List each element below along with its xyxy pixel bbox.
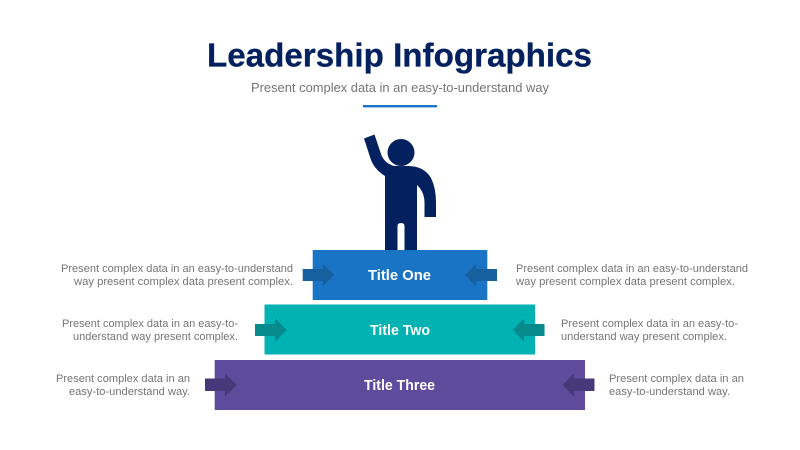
text block: tier one right: Present complex data in an easy-to-understand [516,263,748,275]
text block: tier one left: way present complex data present complex. [73,276,293,288]
text block: tier two right: understand way present complex. [561,331,727,343]
arrow: tier three right [563,373,594,397]
subtitle: Present complex data in an easy-to-understand way [251,80,549,95]
text block: tier three left [56,373,190,398]
panel: tier two [264,304,535,354]
text block: tier three right: easy-to-understand way. [609,386,730,398]
text block: tier one right [515,263,748,288]
text block: tier three left: Present complex data in an [56,373,190,385]
icon: leader figure with raised arm [364,134,436,250]
text block: tier three right [609,373,744,398]
text block: tier two right [561,318,738,343]
text block: tier two left [62,318,238,343]
text block: tier two right: Present complex data in an easy-to- [561,318,738,330]
panel: tier one [313,250,487,300]
heading: title three: Title Three [364,377,435,394]
text block: tier two left: understand way present complex. [73,331,238,343]
arrow: tier two right [513,318,544,342]
heading: title one: Title One [368,267,431,284]
title underline [363,105,437,107]
text block: tier two left: Present complex data in an easy-to- [62,318,238,330]
arrow: tier one left [303,264,334,286]
arrow: tier three left [205,373,237,397]
text block: tier one left [61,263,293,288]
panel: tier three [215,360,585,410]
title: Leadership Infographics [207,36,592,74]
text block: tier three right: Present complex data in an [609,373,744,385]
text block: tier one left: Present complex data in an easy-to-understand [61,263,293,275]
text block: tier one right: way present complex data present complex. [515,276,735,288]
text block: tier three left: easy-to-understand way. [69,386,190,398]
arrow: tier two left [255,318,287,342]
heading: title two: Title Two [370,322,430,339]
arrow: tier one right [465,264,497,286]
